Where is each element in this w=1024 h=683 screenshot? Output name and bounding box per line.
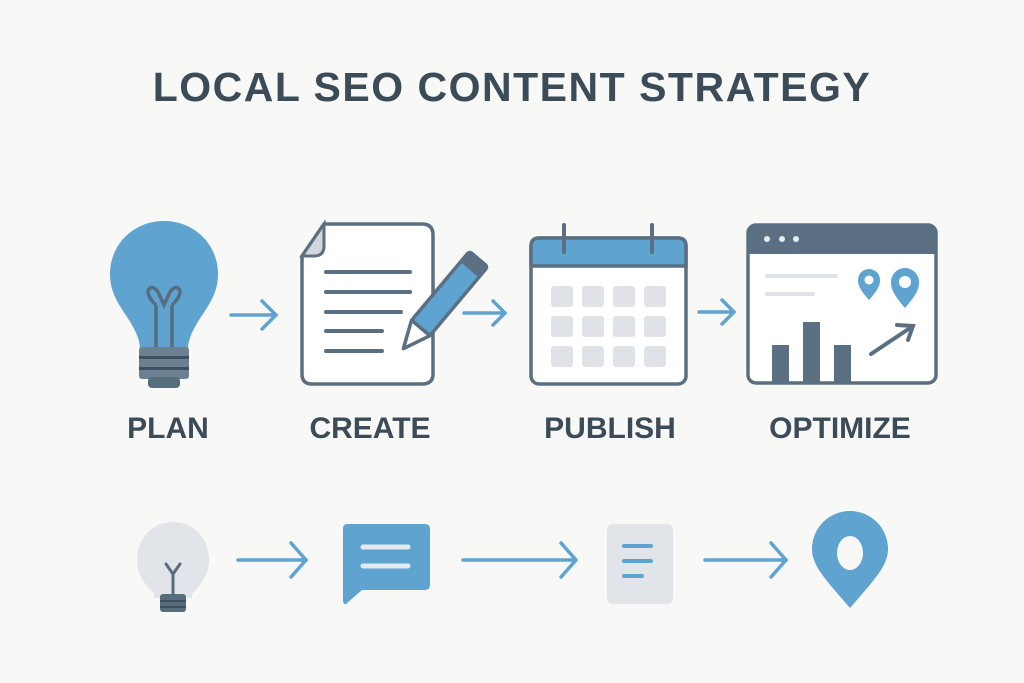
icon: browser analytics (748, 225, 936, 383)
bottom icon: document (607, 524, 673, 604)
bottom icon: small bulb (137, 522, 209, 612)
label: publish: PUBLISH (544, 412, 676, 445)
label: create: CREATE (309, 412, 431, 445)
icon: document with pencil (302, 224, 488, 384)
label: plan: PLAN (127, 412, 209, 445)
arrow 2 (464, 301, 505, 325)
label: optimize: OPTIMIZE (769, 412, 911, 445)
bottom arrow 1 (238, 543, 306, 577)
arrow 1 (231, 301, 276, 329)
bottom arrow 2 (463, 543, 576, 577)
bottom icon: location pin (812, 511, 888, 608)
icon: light bulb (110, 221, 218, 388)
bottom arrow 3 (705, 543, 786, 577)
arrow 3 (699, 300, 734, 324)
title: LOCAL SEO CONTENT STRATEGY (153, 64, 871, 110)
bottom icon: chat bubble (343, 524, 430, 604)
icon: calendar (531, 225, 686, 384)
